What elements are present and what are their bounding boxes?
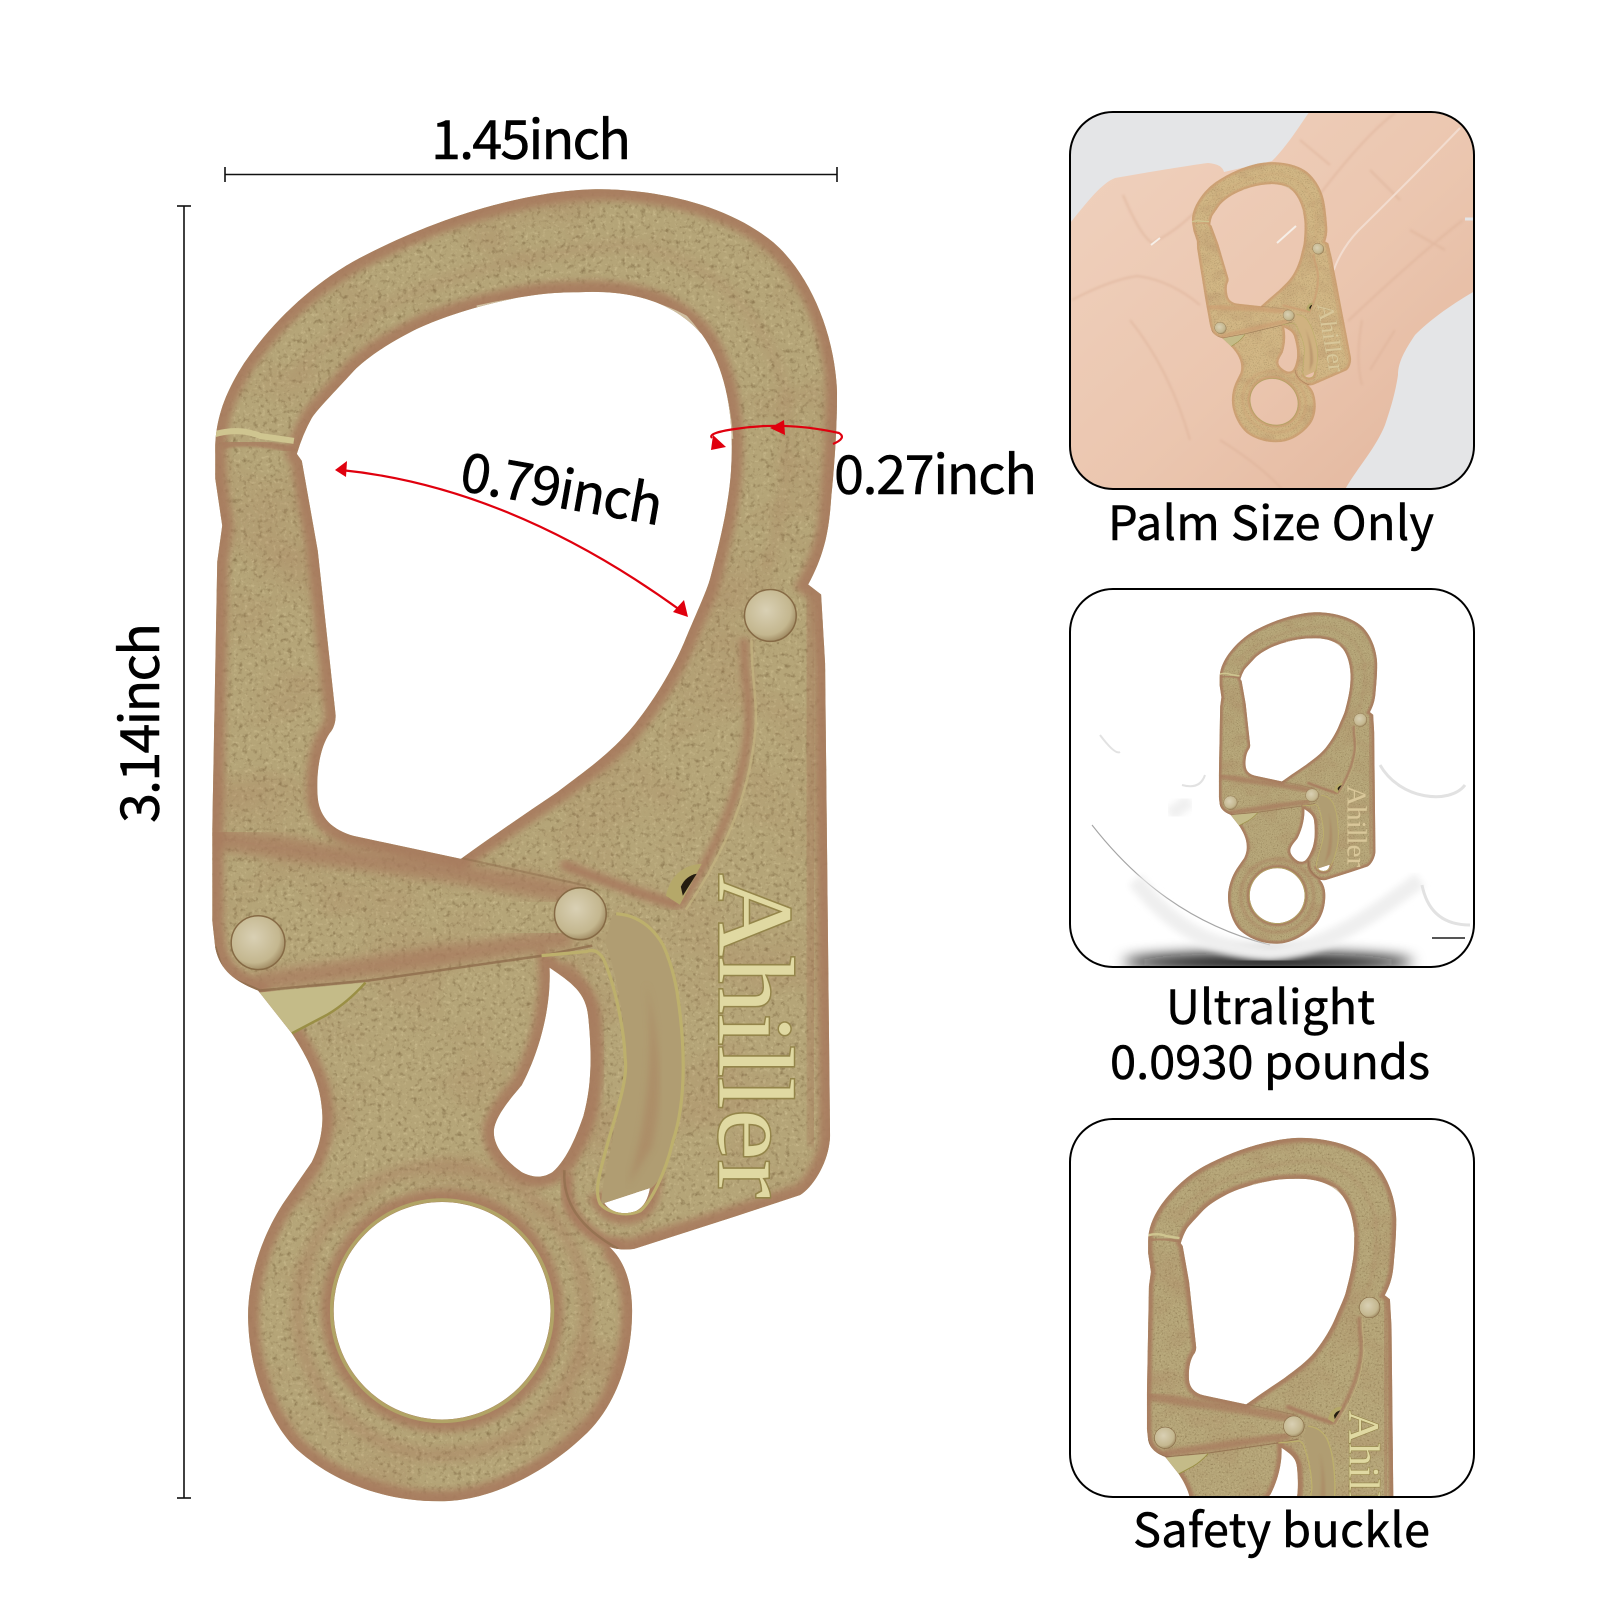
engraved brand: Ahiller	[696, 874, 815, 1198]
thickness arrow	[711, 420, 842, 450]
hook close-up	[1146, 1138, 1396, 1496]
panel: palm size	[1066, 108, 1480, 495]
caption: weight: 0.0930 pounds	[1110, 1024, 1430, 1093]
hook in palm	[1192, 162, 1352, 442]
hook close-up: Ahiller	[1339, 1410, 1386, 1539]
hook in palm: Ahiller	[1311, 302, 1350, 373]
hook	[1215, 610, 1382, 948]
panel: safety buckle	[1069, 1118, 1475, 1498]
feathers and shadow	[1092, 735, 1470, 971]
opening label: 0.79inch	[455, 428, 670, 541]
caption: palm size: Palm Size Only	[1108, 485, 1434, 554]
hook: Ahiller	[1341, 785, 1371, 867]
width dimension line	[224, 167, 837, 182]
thickness label: 0.27inch	[834, 431, 1037, 510]
caption: ultralight: Ultralight	[1166, 969, 1375, 1038]
height label: 3.14inch	[96, 623, 175, 823]
panel: ultralight	[1070, 589, 1474, 971]
hand	[1066, 108, 1480, 495]
caption: safety buckle: Safety buckle	[1133, 1492, 1430, 1561]
opening arrow	[335, 461, 688, 617]
width label: 1.45inch	[431, 96, 631, 175]
height dimension line	[177, 206, 191, 1498]
